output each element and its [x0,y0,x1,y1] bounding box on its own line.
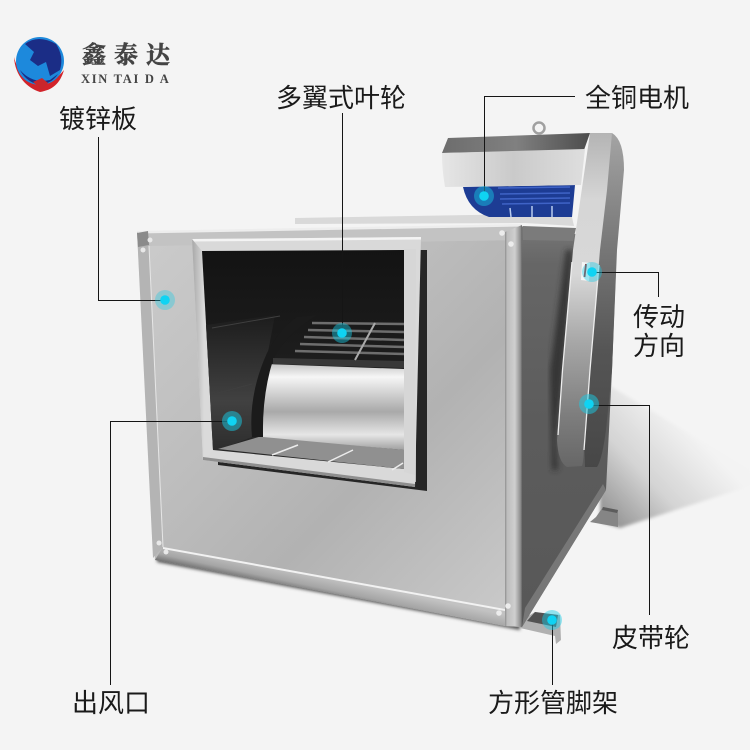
cabinet front panel [137,225,522,627]
label: multi-wing impeller: 多翼式叶轮 [276,83,406,113]
logo Chinese name: 鑫泰达 [82,42,178,69]
air outlet [192,237,427,491]
motor hood [442,133,590,187]
impeller lip [273,358,404,368]
belt guard edge highlights [558,262,599,450]
floor shadow behind cabinet [600,380,750,528]
outlet frame [192,237,421,487]
outlet inner [202,250,404,469]
shadow of belt guard on side [550,250,573,470]
label: galvanized sheet: 镀锌板 [59,104,137,134]
label: belt pulley: 皮带轮 [612,623,690,653]
top frame rail [137,225,522,246]
impeller blades [295,323,404,354]
motor [463,185,575,217]
fan cabinet [137,213,617,627]
left frame rail [137,232,163,558]
cabinet side [520,226,617,627]
corner block top left [137,231,149,247]
logo Latin name: XIN TAI D A [81,72,170,86]
outlet shadow [218,250,427,491]
fan drum [263,364,404,450]
label: drive direction: 传动 [633,302,685,332]
logo [14,37,178,92]
cabinet top lid [295,213,574,226]
icon: globe with handshake [14,37,64,92]
label: drive direction: 方向 [633,331,685,361]
label: square tube foot: 方形管脚架 [488,688,618,718]
front foot [518,612,561,644]
belt guard [557,133,624,467]
right corner post [505,225,522,627]
bottom frame rail [155,547,505,626]
eye bolt [534,122,544,134]
label: air outlet: 出风口 [72,688,150,718]
floor shadow under cabinet [157,556,520,630]
direction arrow mark [581,262,590,281]
outlet right lip [404,249,416,475]
belt guard light band [557,133,612,467]
drum arc housing [251,315,317,437]
callout lines [98,96,658,685]
outlet floor [218,436,404,469]
marker dots [155,186,602,630]
belt guard dark band [580,133,624,467]
rear foot [590,507,618,527]
outlet left wall [206,315,275,450]
label: copper motor: 全铜电机 [585,83,689,113]
